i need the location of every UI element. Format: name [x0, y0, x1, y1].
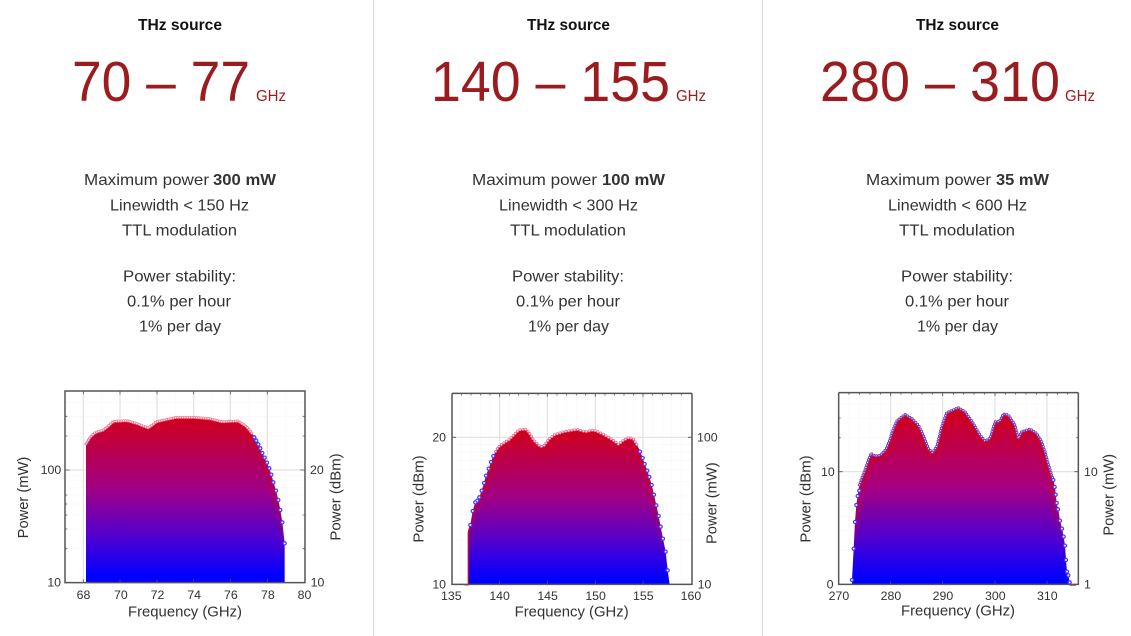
specifications text: [472, 172, 666, 240]
data markers dense: [496, 429, 637, 451]
panel: 140–155 GHz source: [412, 17, 720, 620]
x axis ticks: 280: [881, 589, 901, 603]
x axis ticks: [77, 588, 312, 602]
specifications text: Maximum power: [84, 172, 210, 189]
x axis ticks: 145: [537, 589, 558, 603]
y axis title left: Power (mW): [16, 457, 32, 538]
heading: THz source: [138, 17, 222, 34]
specifications text: 300 mW: [213, 172, 277, 189]
column divider right: [762, 0, 763, 636]
power stability text: Power stability:: [123, 268, 236, 286]
x axis ticks: [441, 589, 701, 603]
specifications text: [866, 172, 1050, 240]
heading: THz source: [527, 17, 610, 34]
data markers sparse: [254, 437, 285, 543]
y axis title right: Power (mW): [1101, 454, 1117, 536]
y axis ticks left: 20: [432, 430, 446, 444]
specifications text: Maximum power: [866, 172, 992, 189]
x axis title: Frequency (GHz): [128, 604, 242, 620]
x axis ticks: 155: [633, 589, 654, 603]
chart: power vs frequency 270–315 GHz: 0: [827, 578, 834, 592]
data markers sparse: [852, 480, 1070, 582]
data markers dense: [859, 408, 1053, 485]
frequency range: 280 – 310: [820, 50, 1060, 114]
specifications text: Linewidth < 300 Hz: [499, 198, 638, 214]
x axis ticks: 70: [114, 588, 128, 602]
specifications text: TTL modulation: [510, 222, 626, 240]
power stability text: 0.1% per hour: [516, 294, 621, 310]
y axis title right: Power (dBm): [329, 453, 345, 541]
power stability text: 0.1% per hour: [127, 294, 232, 310]
x axis title: Frequency (GHz): [901, 603, 1015, 619]
y axis ticks right: 100: [697, 430, 718, 444]
x axis ticks: 72: [151, 588, 165, 602]
chart: power vs frequency 135–160 GHz: 10: [432, 578, 446, 592]
panel: 280–310 GHz source: [799, 17, 1117, 619]
power stability text: 1% per day: [917, 318, 998, 336]
panel: 70–77 GHz source: [16, 17, 345, 620]
chart: power vs frequency 68–80 GHz: 10: [47, 576, 61, 590]
y axis title left: Power (dBm): [799, 455, 815, 543]
specifications text: Linewidth < 600 Hz: [888, 198, 1027, 214]
y axis ticks right: 10: [1084, 465, 1098, 479]
x axis ticks: 78: [261, 588, 275, 602]
chart: power vs frequency 68–80 GHz: 10: [311, 576, 325, 590]
y axis ticks left: 100: [41, 463, 61, 477]
x axis ticks: 290: [933, 589, 953, 603]
power stability text: [901, 268, 1013, 336]
power stability text: 1% per day: [139, 318, 221, 336]
column divider left: [373, 0, 374, 636]
power stability text: 0.1% per hour: [905, 294, 1010, 310]
power stability text: 1% per day: [528, 318, 609, 336]
frequency range: 140 – 155: [431, 50, 670, 114]
chart: power vs frequency 270–315 GHz: [799, 393, 1117, 619]
x axis ticks: 270: [829, 589, 849, 603]
unit: GHz: [676, 88, 706, 105]
x axis ticks: 300: [985, 589, 1006, 603]
x axis ticks: 160: [681, 589, 701, 603]
specifications text: 100 mW: [602, 172, 666, 189]
specifications text: TTL modulation: [899, 222, 1015, 240]
data markers sparse: [470, 452, 668, 570]
specifications text: Maximum power: [472, 172, 598, 189]
chart: power vs frequency 68–80 GHz: [16, 391, 345, 620]
x axis ticks: 310: [1037, 589, 1058, 603]
y axis ticks left: 10: [821, 465, 835, 479]
x axis ticks: 80: [298, 588, 312, 602]
unit: GHz: [1065, 88, 1095, 105]
specifications text: [84, 172, 277, 240]
x axis ticks: 68: [77, 588, 91, 602]
x axis title: Frequency (GHz): [515, 604, 629, 620]
x axis ticks: 135: [441, 589, 462, 603]
y axis title left: Power (dBm): [412, 455, 428, 543]
data markers dense: [86, 417, 253, 444]
frequency range: 70 – 77: [72, 50, 250, 114]
power stability text: [123, 268, 236, 336]
power stability text: Power stability:: [901, 268, 1013, 286]
chart: power vs frequency 135–160 GHz: 10: [698, 578, 712, 592]
specifications text: 35 mW: [996, 172, 1050, 189]
power stability text: [512, 268, 624, 336]
power stability text: Power stability:: [512, 268, 624, 286]
unit: GHz: [256, 88, 286, 105]
chart: power vs frequency 270–315 GHz: 1: [1084, 578, 1091, 592]
x axis ticks: 74: [187, 588, 201, 602]
x axis ticks: 140: [489, 589, 510, 603]
heading: THz source: [916, 17, 999, 34]
x axis ticks: 150: [585, 589, 606, 603]
x axis ticks: 76: [224, 588, 238, 602]
y axis ticks right: 20: [310, 463, 324, 477]
y axis title right: Power (mW): [704, 462, 720, 544]
specifications text: Linewidth < 150 Hz: [110, 198, 249, 214]
x axis ticks: [829, 589, 1058, 603]
chart: power vs frequency 135–160 GHz: [412, 393, 720, 620]
specifications text: TTL modulation: [122, 222, 237, 240]
